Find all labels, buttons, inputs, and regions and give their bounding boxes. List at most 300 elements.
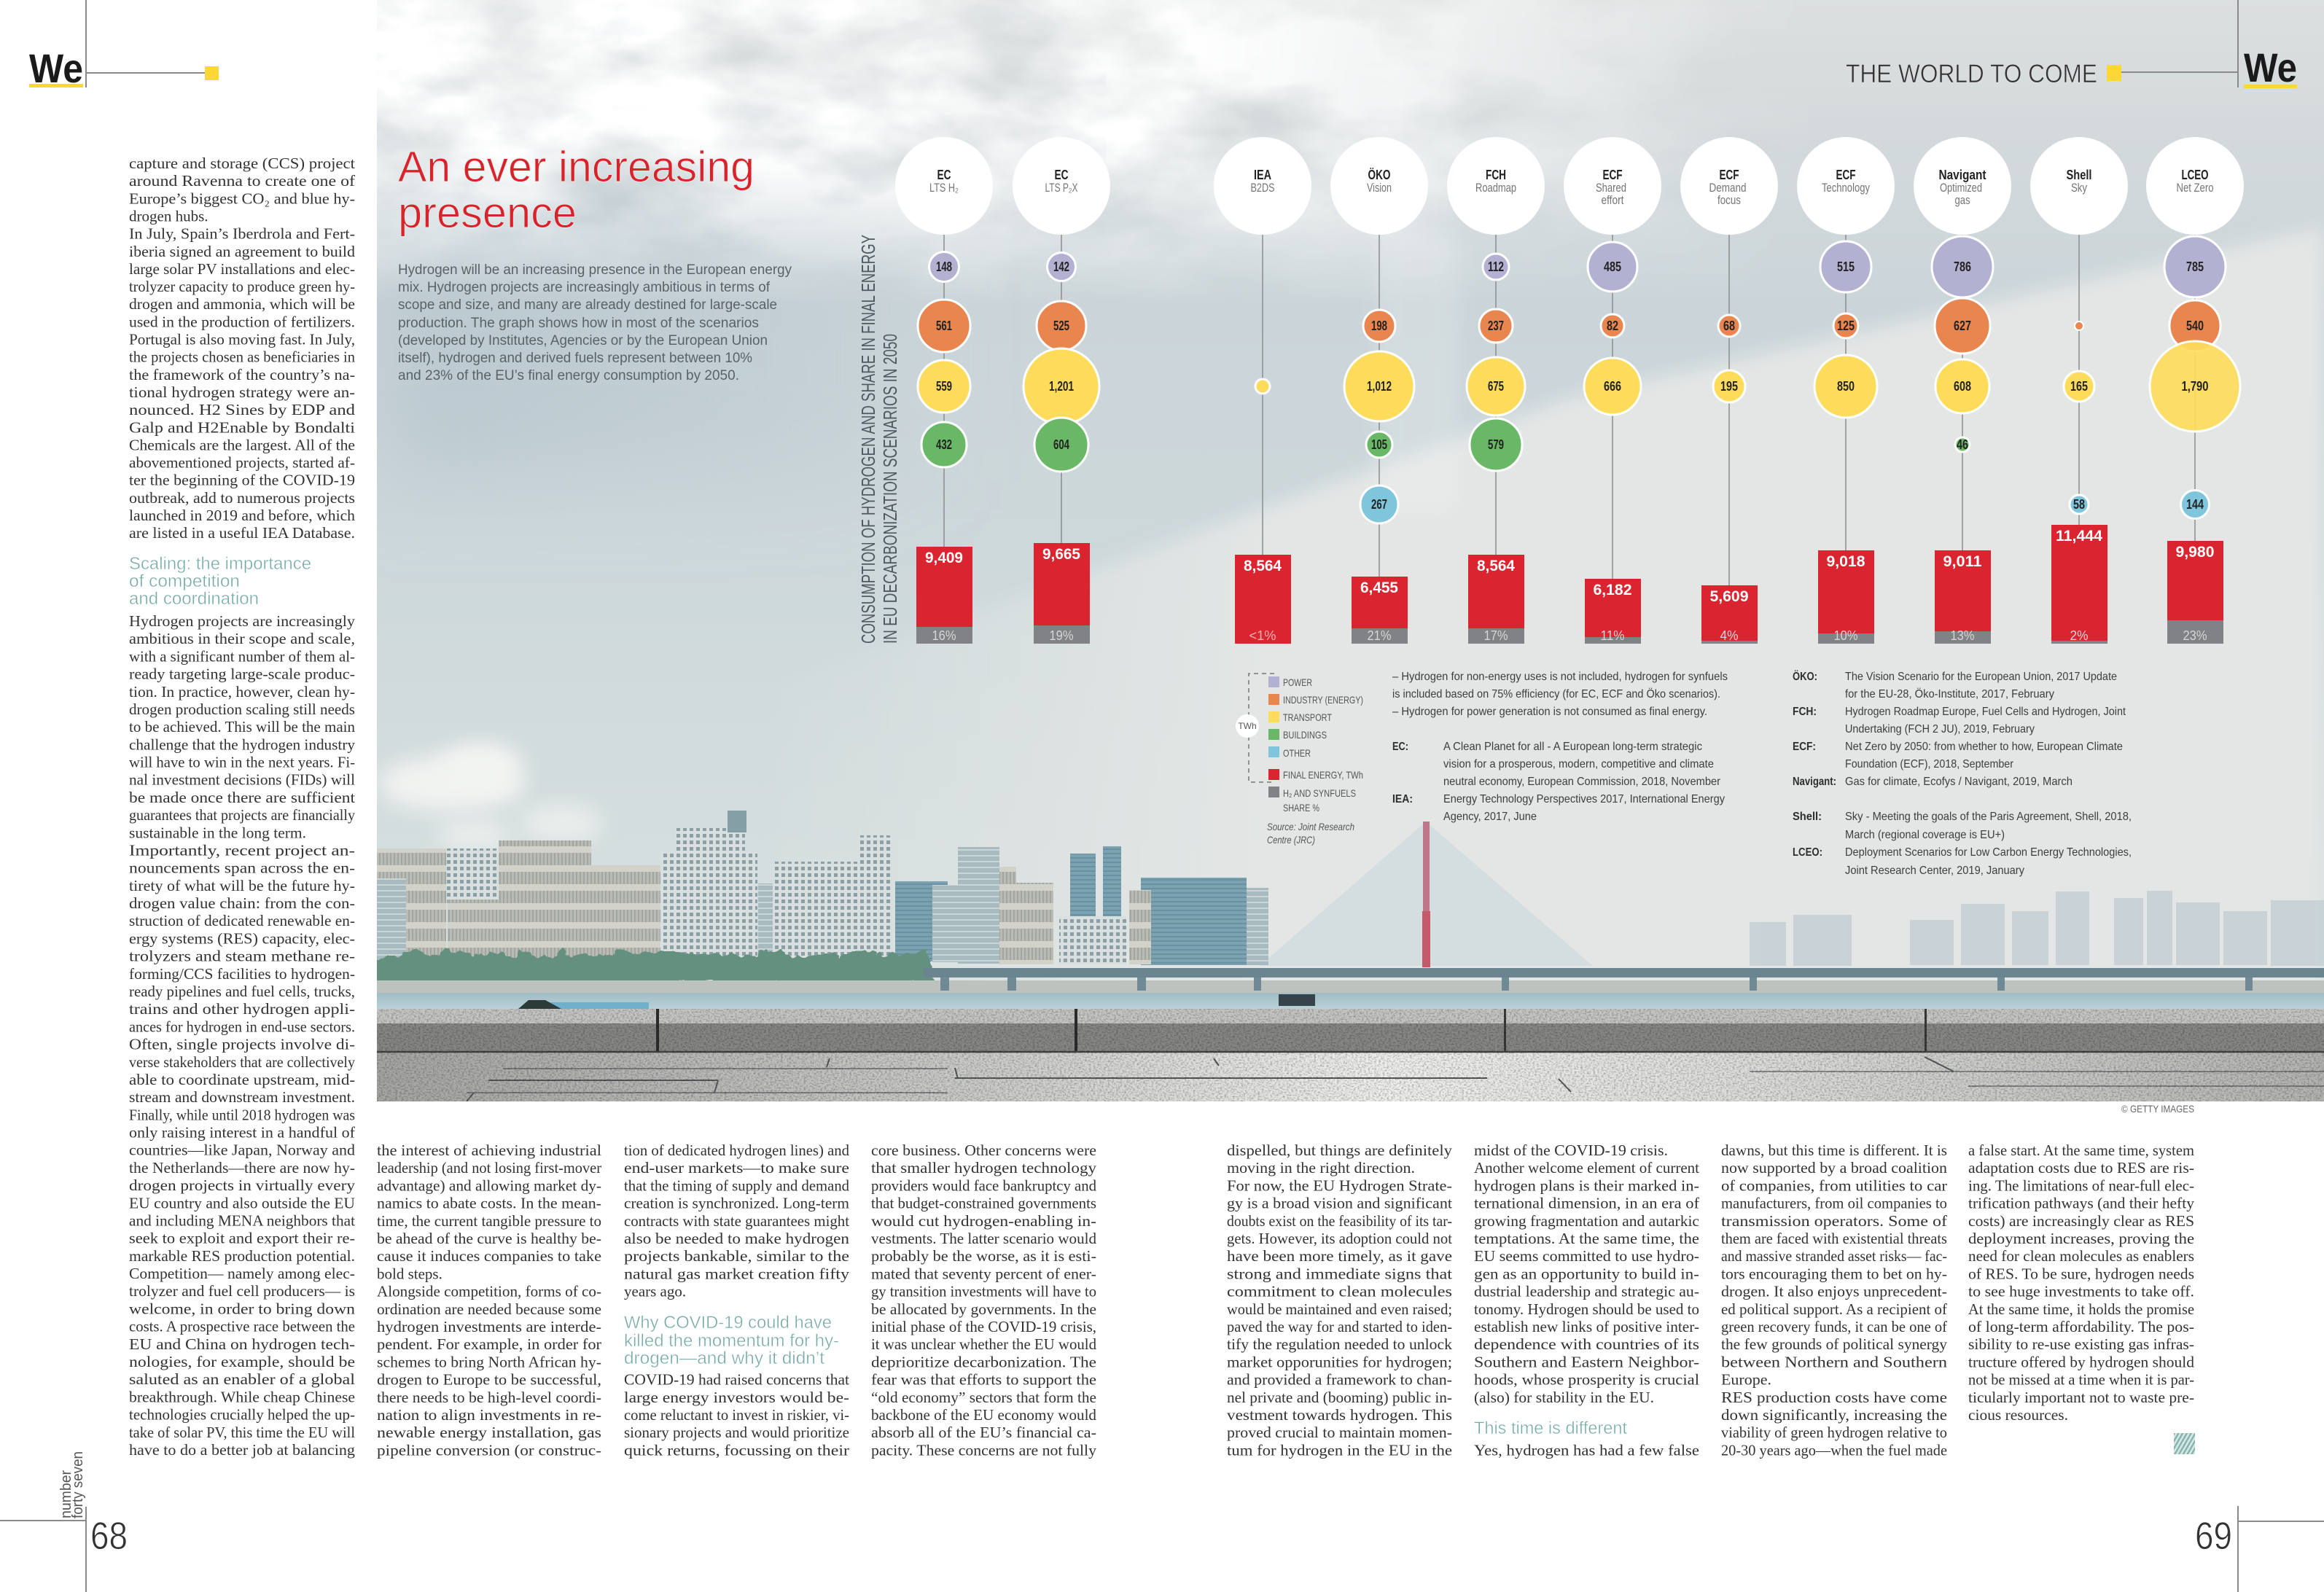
- text block: column 6: gen as an opportunity to build in-: [1474, 1265, 1699, 1282]
- bar: final energy and share: 9,011: [1943, 553, 1982, 570]
- bubble: power: 148: [936, 260, 952, 274]
- riverbank and water: [377, 980, 2324, 1010]
- bar: final energy and share: 9,409: [925, 550, 963, 566]
- bar: final energy and share: [916, 547, 972, 644]
- column: ECF Shared effort: [1564, 137, 1661, 644]
- text block: chart introduction: (developed by Institutes, Agencies or by the European Union: [398, 333, 768, 348]
- bar: final energy and share: 10%: [1834, 628, 1857, 643]
- text block: left column upper: trolyzer capacity to produce green hy-: [129, 278, 355, 295]
- text block: column 5: have been more timely, as it gave: [1227, 1247, 1452, 1265]
- text block: chart introduction: and 23% of the EU’s final energy consumption by 2050.: [398, 368, 739, 383]
- bar: final energy and share: [1235, 555, 1291, 644]
- text block: column 2: the interest of achieving industrial: [377, 1142, 601, 1159]
- bar: final energy and share: 19%: [1050, 628, 1073, 643]
- text block: left column lower: take of solar PV, this time the EU will: [129, 1424, 355, 1441]
- title: presence: [398, 189, 577, 237]
- text block: left column lower: sustainable in the long term.: [129, 824, 306, 841]
- bubble: transport: [1023, 348, 1099, 424]
- text block: column 8: a false start. At the same time, system: [1968, 1142, 2194, 1159]
- text block: left column upper: capture and storage (CCS) project: [129, 155, 355, 172]
- text block: scenario references: Gas for climate, Ecofys / Navigant, 2019, March: [1845, 776, 2073, 788]
- text block: column 5: would be maintained and even raised;: [1227, 1300, 1452, 1318]
- text block: chart notes and EC, IEA references: vision for a prosperous, modern, competitive and climate: [1443, 758, 1714, 770]
- scenario circle: [1797, 137, 1895, 235]
- text block: left column lower: only raising interest in a handful of: [129, 1124, 355, 1142]
- scenario circle: Shared: [1596, 182, 1626, 195]
- text block: left column lower: have to do a better job at balancing: [129, 1441, 356, 1459]
- chart title, rotated: [857, 235, 901, 644]
- column: EC LTS H2: [895, 137, 993, 644]
- text block: left column lower: EU and China on hydrogen tech-: [129, 1335, 355, 1353]
- scenario circle: Navigant: [1939, 168, 1986, 182]
- text block: column 4: it was unclear whether the EU would: [871, 1335, 1096, 1353]
- text block: column 4: deprioritize decarbonization. The: [871, 1353, 1096, 1370]
- scenario circle: ÖKO: [1368, 168, 1391, 182]
- text block: column 6: hoods, whose prosperity is crucial: [1474, 1371, 1699, 1389]
- bubble: industry: 237: [1488, 319, 1504, 333]
- bar: final energy and share: [2167, 541, 2223, 644]
- text block: left column upper: nounced. H2 Sines by EDP and: [129, 401, 356, 418]
- text block: chart notes and EC, IEA references: A Clean Planet for all - A European long-term strategic: [1443, 741, 1702, 753]
- bubble: transport: [1713, 370, 1745, 402]
- text block: column 7: of companies, from utilities to car: [1721, 1177, 1947, 1194]
- text block: left column lower: the Netherlands—there are now hy-: [129, 1159, 355, 1177]
- text block: chart notes and EC, IEA references: – Hydrogen for power generation is not consumed as final energy.: [1392, 706, 1707, 718]
- bubble: transport: 850: [1837, 379, 1855, 394]
- text block: scenario references: ECF:: [1793, 741, 1816, 753]
- text block: column 2: Alongside competition, forms of co-: [377, 1283, 601, 1300]
- icon: right masthead with section title and We logo: We: [2244, 44, 2297, 90]
- scenario circle: [1330, 137, 1428, 235]
- text block: column 3: quick returns, focussing on their: [624, 1441, 849, 1459]
- bubble: power: 515: [1837, 260, 1855, 274]
- bubble: power: 485: [1604, 260, 1621, 274]
- text block: column 7: [1721, 1142, 1948, 1459]
- bubble: power: [1588, 242, 1637, 292]
- panel: photo of city skyline under a cloudy sky: [377, 0, 2324, 1101]
- text block: column 5: commitment to clean molecules: [1227, 1283, 1452, 1300]
- text block: scenario references: Navigant:: [1793, 776, 1836, 788]
- bubble: buildings: [921, 422, 967, 467]
- text block: chart introduction: Hydrogen will be an increasing presence in the European energy: [398, 262, 792, 278]
- text block: column 2: leadership (and not losing first-mover: [377, 1159, 601, 1177]
- text block: column 5: gy is a broad vision and significant: [1227, 1195, 1452, 1212]
- scenario circle: Roadmap: [1475, 182, 1516, 195]
- text block: column 4: be allocated by governments. In the: [871, 1300, 1096, 1318]
- text block: left column lower: drogen value chain: from the con-: [129, 894, 355, 912]
- scenario circle: B2DS: [1251, 182, 1274, 195]
- text block: column 3: also be needed to make hydrogen: [624, 1230, 850, 1247]
- text block: column 3: COVID-19 had raised concerns that: [624, 1371, 849, 1389]
- text block: column 7: RES production costs have come: [1721, 1389, 1947, 1406]
- text block: chart introduction: mix. Hydrogen projects are increasingly ambitious in terms of: [398, 280, 771, 295]
- text block: scenario references: The Vision Scenario for the European Union, 2017 Update: [1845, 671, 2117, 683]
- text block: column 4: vestments. The latter scenario would: [871, 1230, 1097, 1247]
- legend unit badge: [1236, 714, 1259, 738]
- bubble: transport: [1584, 358, 1641, 415]
- scenario circle: Sky: [2071, 182, 2088, 195]
- text block: scenario references: Sky - Meeting the goals of the Paris Agreement, Shell, 2018,: [1845, 811, 2132, 823]
- text block: left column lower: ready targeting large-scale produc-: [129, 666, 355, 683]
- text block: left column upper: abovementioned projects, started af-: [129, 454, 355, 472]
- bubble: other: [1360, 485, 1398, 523]
- text block: column 8: At the same time, it holds the promise: [1968, 1300, 2194, 1318]
- text block: left column upper: launched in 2019 and before, which: [129, 507, 356, 524]
- text block: column 5: and provided a framework to chan-: [1227, 1371, 1452, 1389]
- text block: column 8: sibility to re-use existing gas infras-: [1968, 1335, 2194, 1353]
- bubble: buildings: [1366, 432, 1392, 458]
- bubble: transport: 195: [1720, 379, 1738, 394]
- bubble: industry: [1718, 315, 1740, 337]
- scenario circle: LTS H₂: [929, 182, 959, 195]
- bubble: power: [1483, 254, 1509, 280]
- text block: column 6: hydrogen plans is their marked in-: [1474, 1177, 1699, 1194]
- scenario circle: [1564, 137, 1661, 235]
- text block: column 6: EU seems committed to use hydro-: [1474, 1247, 1699, 1265]
- text block: left column lower: nologies, for example, should be: [129, 1353, 355, 1370]
- text block: chart introduction: production. The graph shows how in most of the scenarios: [398, 316, 759, 331]
- icon: left masthead with We logo: We: [29, 45, 83, 91]
- text block: left column lower: markable RES production potential.: [129, 1247, 355, 1265]
- text block: column 4: absorb all of the EU’s financial ca-: [871, 1424, 1096, 1441]
- text block: left column lower: to be achieved. This will be the main: [129, 718, 355, 735]
- scenario circle: EC: [1054, 168, 1069, 182]
- column: ECF Demand focus: [1680, 137, 1778, 644]
- text block: column 4: pacity. These concerns are not fully: [871, 1441, 1097, 1459]
- text block: left column upper: drogen and ammonia, which will be: [129, 295, 355, 313]
- text block: chart notes and EC, IEA references: Agency, 2017, June: [1443, 811, 1537, 823]
- text block: column 4: providers would face bankruptcy and: [871, 1177, 1096, 1194]
- text block: chart notes and EC, IEA references: EC:: [1392, 741, 1408, 753]
- text block: column 6: (also) for stability in the EU.: [1474, 1389, 1654, 1406]
- scenario circle: ECF: [1836, 168, 1856, 182]
- text block: left column upper: outbreak, add to numerous projects: [129, 489, 355, 507]
- bar: final energy and share: [1352, 577, 1408, 644]
- text block: left column lower: tirety of what will be the future hy-: [129, 877, 355, 894]
- text block: scenario references: Undertaking (FCH 2 JU), 2019, February: [1845, 723, 2035, 735]
- bubble: transport: [1935, 359, 1989, 413]
- text block: column 5: doubts exist on the feasibility of its tar-: [1227, 1212, 1452, 1230]
- right page footer with page number: 69: [2195, 1515, 2232, 1558]
- text block: column 3: years ago.: [624, 1283, 686, 1300]
- column: Shell Sky: [2030, 137, 2128, 644]
- bubble: industry: [918, 300, 970, 352]
- bubble: industry: [1833, 313, 1858, 338]
- photo credit: © GETTY IMAGES: [2121, 1103, 2194, 1115]
- bubble: power: [2164, 236, 2226, 297]
- text block: left column lower: ambitious in their scope and scale,: [129, 630, 355, 647]
- bubble and bar chart: [895, 137, 2244, 644]
- text block: left column lower: ergy systems (RES) capacity, elec-: [129, 929, 355, 947]
- chart title, rotated: IN EU DECARBONIZATION SCENARIOS IN 2050: [879, 334, 901, 644]
- text block: column 6: temptations. At the same time, the: [1474, 1230, 1699, 1247]
- bar: final energy and share: [1468, 555, 1524, 644]
- text block: column 2: namics to abate costs. In the mean-: [377, 1195, 601, 1212]
- legend: FINAL ENERGY, TWh: [1283, 769, 1363, 781]
- heading: why COVID-19: killed the momentum for hy-: [624, 1331, 839, 1351]
- text block: column 8: adaptation costs due to RES are ris-: [1968, 1159, 2194, 1177]
- text block: left column lower: will have to win in the next years. Fi-: [129, 754, 355, 771]
- text block: column 2: cause it induces companies to take: [377, 1247, 601, 1265]
- legend: BUILDINGS: [1283, 729, 1327, 741]
- text block: column 3: natural gas market creation fifty: [624, 1265, 850, 1282]
- text block: column 7: manufacturers, from oil companies to: [1721, 1195, 1947, 1212]
- text block: column 5: proved crucial to maintain momen-: [1227, 1424, 1452, 1441]
- text block: left column upper: Europe’s biggest CO₂ and blue hy-: [129, 190, 355, 207]
- stone parapet: [377, 1009, 2324, 1052]
- bar: final energy and share: 8,564: [1477, 558, 1515, 574]
- text block: column 5: gets. However, its adoption could not: [1227, 1230, 1452, 1247]
- scenario circle: Shell: [2066, 168, 2092, 182]
- heading: scaling: Scaling: the importance: [129, 554, 311, 574]
- text block: left column lower: [129, 612, 356, 1459]
- text block: left column lower: verse stakeholders that are collectively: [129, 1053, 355, 1071]
- text block: column 7: dawns, but this time is different. It is: [1721, 1142, 1947, 1159]
- bubble: buildings: 105: [1371, 437, 1387, 452]
- bubble: industry: 627: [1954, 319, 1971, 333]
- text block: column 8: of long-term affordability. The pos-: [1968, 1318, 2194, 1335]
- scenario circle: Net Zero: [2177, 182, 2213, 195]
- bubble: industry: 82: [1607, 319, 1618, 333]
- text block: left column lower: trolyzers and steam methane re-: [129, 948, 355, 965]
- text block: column 2: advantage) and allowing market dy-: [377, 1177, 601, 1194]
- bar: final energy and share: 8,564: [1244, 558, 1282, 574]
- text block: column 4: that budget-constrained governments: [871, 1195, 1096, 1212]
- text block: column 7: viability of green hydrogen relative to: [1721, 1424, 1947, 1441]
- text block: left column upper: [129, 155, 356, 542]
- text block: scenario references: March (regional coverage is EU+): [1845, 829, 2005, 841]
- text block: left column upper: used in the production of fertilizers.: [129, 313, 355, 330]
- text block: column 4: backbone of the EU economy would: [871, 1406, 1096, 1424]
- bar: final energy and share: [1818, 550, 1874, 644]
- text block: chart notes and EC, IEA references: IEA:: [1392, 793, 1413, 805]
- bar: final energy and share: 9,980: [2175, 544, 2215, 561]
- text block: left column lower: ances for hydrogen in end-use sectors.: [129, 1018, 355, 1035]
- bubble: power: [1047, 252, 1076, 281]
- icon: right masthead with section title and We logo: [1846, 0, 2297, 90]
- bar: final energy and share: 4%: [1720, 628, 1738, 643]
- bubble: transport: 675: [1488, 379, 1504, 394]
- text block: left column lower: and including MENA neighbors that: [129, 1211, 355, 1229]
- text block: scenario references: [1793, 669, 2132, 877]
- text block: column 7: and massive stranded asset risks— fac-: [1721, 1247, 1947, 1265]
- left page footer with issue label and page number: forty seven: [70, 1451, 86, 1518]
- left page footer with issue label and page number: number: [58, 1470, 74, 1518]
- text block: left column lower: tion. In practice, however, clean hy-: [129, 683, 355, 701]
- scenario circle: FCH: [1486, 168, 1506, 182]
- legend source: Source: Joint Research: [1267, 821, 1354, 832]
- text block: column 8: costs) are increasingly clear as RES: [1968, 1212, 2194, 1230]
- text block: column 7: tors encouraging them to bet on hy-: [1721, 1265, 1947, 1282]
- bubble: industry: [1935, 298, 1990, 354]
- bubble: transport: [2150, 341, 2240, 432]
- bubble: transport: [2064, 371, 2094, 402]
- bar: final energy and share: 5,609: [1710, 588, 1748, 605]
- text block: column 6: dustrial leadership and strategic au-: [1474, 1283, 1699, 1300]
- scenario circle: ECF: [1602, 168, 1623, 182]
- text block: column 4: probably be the worse, as it is esti-: [871, 1247, 1096, 1265]
- column: EC LTS P2X: [1013, 137, 1110, 644]
- text block: left column lower: with a significant number of them al-: [129, 647, 355, 665]
- text block: left column upper: Portugal is also moving fast. In July,: [129, 331, 355, 348]
- scenario circle: IEA: [1254, 168, 1271, 182]
- text block: column 8: trification pathways (and their hefty: [1968, 1195, 2195, 1212]
- bubble: industry: [2075, 321, 2083, 330]
- text block: chart notes and EC, IEA references: is included based on 75% efficiency (for EC, ECF and Öko scenarios).: [1392, 687, 1720, 701]
- text block: left column lower: forming/CCS facilities to hydrogen-: [129, 965, 355, 983]
- bubble: buildings: 432: [936, 437, 952, 452]
- bar: final energy and share: <1%: [1249, 628, 1276, 643]
- text block: left column lower: saluted as an enabler of a global: [129, 1370, 355, 1388]
- text block: left column lower: breakthrough. While cheap Chinese: [129, 1388, 355, 1405]
- legend: INDUSTRY (ENERGY): [1283, 694, 1363, 706]
- text block: left column lower: be made once there are sufficient: [129, 789, 355, 806]
- bubble: transport: [1255, 379, 1270, 394]
- bubble: buildings: 579: [1488, 437, 1504, 452]
- text block: scenario references: Deployment Scenarios for Low Carbon Energy Technologies,: [1845, 846, 2132, 859]
- text block: column 2: nation to align investments in re-: [377, 1406, 601, 1424]
- bar: final energy and share: 17%: [1484, 628, 1508, 643]
- text block: column 3: creation is synchronized. Long-term: [624, 1195, 849, 1212]
- bubble: other: 267: [1371, 497, 1387, 512]
- text block: left column upper: around Ravenna to create one of: [129, 172, 355, 190]
- text block: column 2: pendent. For example, in order for: [377, 1335, 601, 1353]
- bar: final energy and share: 21%: [1368, 628, 1391, 643]
- text block: column 8: [1968, 1142, 2195, 1424]
- bubble: industry: [1363, 310, 1395, 342]
- legend: [1236, 674, 1363, 846]
- text block: column 7: now supported by a broad coalition: [1721, 1159, 1948, 1177]
- text block: column 6: Another welcome element of current: [1474, 1159, 1699, 1177]
- bubble: industry: [1479, 309, 1513, 343]
- column: Navigant Optimized gas: [1914, 137, 2011, 644]
- column: ECF Technology: [1797, 137, 1895, 644]
- text block: left column lower: nouncements span across the en-: [129, 859, 355, 877]
- scenario circle: gas: [1955, 194, 1970, 207]
- text block: column 5: tum for hydrogen in the EU in the: [1227, 1441, 1452, 1459]
- bar: final energy and share: [1935, 550, 1991, 644]
- heading: why COVID-19: drogen—and why it didn’t: [624, 1349, 824, 1368]
- text block: left column lower: guarantees that projects are financially: [129, 806, 355, 824]
- bar: final energy and share: 6,182: [1594, 582, 1631, 598]
- text block: column 7: ed political support. As a recipient of: [1721, 1300, 1947, 1318]
- legend: SHARE %: [1283, 802, 1319, 813]
- bubble: other: 58: [2073, 497, 2085, 512]
- bubble: buildings: [1470, 418, 1522, 471]
- text block: column 2: schemes to bring North African hy-: [377, 1353, 601, 1370]
- text block: column 2: bold steps.: [377, 1265, 442, 1282]
- icon: hatched end mark: [2174, 1433, 2195, 1454]
- text block: left column lower: EU country and also outside the EU: [129, 1194, 355, 1211]
- legend: H₂ AND SYNFUELS: [1283, 787, 1356, 799]
- text block: column 7: between Northern and Southern: [1721, 1353, 1948, 1370]
- bubble: industry: 540: [2186, 319, 2204, 333]
- text block: column 7: Europe.: [1721, 1371, 1771, 1389]
- text block: left column upper: iberia signed an agreement to build: [129, 243, 356, 260]
- text block: left column lower: countries—like Japan, Norway and: [129, 1142, 356, 1159]
- bubble: transport: 666: [1604, 379, 1621, 394]
- text block: left column lower: Hydrogen projects are increasingly: [129, 612, 356, 630]
- bubble: transport: 608: [1954, 379, 1971, 394]
- text block: column 6: growing fragmentation and autarkic: [1474, 1212, 1699, 1230]
- text block: column 5: [1227, 1142, 1453, 1459]
- text block: left column lower: drogen projects in virtually every: [129, 1177, 356, 1194]
- text block: left column lower: struction of dedicated renewable en-: [129, 912, 355, 929]
- bubble: transport: 1,201: [1049, 379, 1074, 394]
- text block: column 5: strong and immediate signs that: [1227, 1265, 1452, 1282]
- bubble: other: [2070, 495, 2089, 514]
- text block: column 2: time, the current tangible pressure to: [377, 1212, 601, 1230]
- text block: column 8: not be missed at a time when it is par-: [1968, 1371, 2194, 1389]
- text block: scenario references: ÖKO:: [1793, 669, 1817, 683]
- text block: column 2: drogen to Europe to be successful,: [377, 1371, 601, 1389]
- text block: column 8: need for clean molecules as enablers: [1968, 1247, 2194, 1265]
- bar: final energy and share: [1585, 579, 1641, 644]
- text block: column 2: [377, 1142, 601, 1459]
- bubble: power: [1820, 241, 1871, 292]
- legend: TRANSPORT: [1283, 711, 1332, 723]
- bar: final energy and share: [1701, 585, 1758, 644]
- text block: column 4: fear was that efforts to support the: [871, 1371, 1096, 1389]
- text block: left column upper: the projects chosen as beneficiaries in: [129, 348, 355, 366]
- text block: chart introduction: [398, 262, 792, 383]
- bubble: power: 786: [1954, 260, 1971, 274]
- text block: column 2: pipeline conversion (or construc-: [377, 1441, 601, 1459]
- legend unit badge: TWh: [1238, 721, 1257, 731]
- text block: column 6: [1474, 1142, 1699, 1459]
- text block: left column lower: technologies crucially helped the up-: [129, 1406, 355, 1424]
- text block: chart notes and EC, IEA references: [1392, 671, 1728, 823]
- distant skyline on the right: [1750, 891, 2324, 966]
- bubble: power: [929, 252, 959, 281]
- text block: left column upper: tional hydrogen strategy were an-: [129, 383, 355, 401]
- text block: column 4: core business. Other concerns were: [871, 1142, 1096, 1159]
- bar: final energy and share: 9,018: [1827, 553, 1865, 570]
- scenario circle: [1914, 137, 2011, 235]
- text block: column 3: contracts with state guarantees might: [624, 1212, 849, 1230]
- scenario circle: Demand: [1709, 182, 1747, 195]
- left page footer with issue label and page number: 68: [90, 1515, 128, 1558]
- text block: left column upper: the framework of the country’s na-: [129, 366, 355, 383]
- bubble: industry: 525: [1053, 319, 1069, 333]
- icon: right masthead with section title and We logo: THE WORLD TO COME: [1846, 60, 2097, 88]
- chart title, rotated: CONSUMPTION OF HYDROGEN AND SHARE IN FINAL ENERGY: [857, 235, 879, 644]
- scenario circle: LCEO: [2181, 168, 2209, 182]
- bubble: transport: [918, 360, 970, 413]
- text block: column 3: that the timing of supply and demand: [624, 1177, 849, 1194]
- scenario circle: EC: [937, 168, 951, 182]
- text block: column 6: dependence with countries of its: [1474, 1335, 1699, 1353]
- text block: chart introduction: itself), hydrogen and derived fuels represent between 10%: [398, 351, 752, 366]
- scenario circle: [1680, 137, 1778, 235]
- scenario circle: effort: [1601, 194, 1624, 207]
- scenario circle: LTS P₂X: [1045, 182, 1077, 195]
- text block: column 6: tonomy. Hydrogen should be used to: [1474, 1300, 1699, 1318]
- heading: why COVID-19: [624, 1313, 839, 1368]
- text block: column 5: vestment towards hydrogen. This: [1227, 1406, 1452, 1424]
- text block: left column lower: ready pipelines and fuel cells, trucks,: [129, 983, 355, 1000]
- text block: column 4: mated that seventy percent of ener-: [871, 1265, 1096, 1282]
- bubble: power: 785: [2186, 260, 2204, 274]
- legend source: Centre (JRC): [1267, 834, 1315, 846]
- text block: left column upper: Chemicals are the largest. All of the: [129, 436, 355, 453]
- text block: column 6: midst of the COVID-19 crisis.: [1474, 1142, 1668, 1159]
- column: FCH Roadmap: [1447, 137, 1545, 644]
- text block: left column lower: Importantly, recent project an-: [129, 841, 355, 859]
- scenario circle: Vision: [1367, 182, 1392, 195]
- bubble: buildings: [1034, 418, 1088, 472]
- title: [398, 143, 754, 237]
